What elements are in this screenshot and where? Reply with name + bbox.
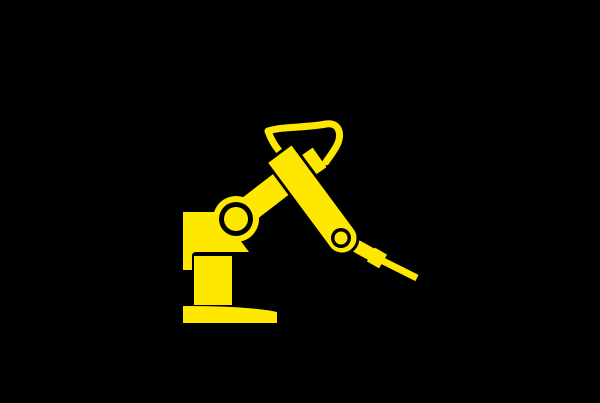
wrist (342, 238, 378, 258)
base foot (183, 306, 277, 323)
shoulder joint (213, 196, 259, 242)
small bracket on forearm (300, 148, 326, 176)
elbow joint (331, 228, 351, 248)
cable loop (268, 124, 340, 162)
tool (367, 248, 387, 268)
upper base block (183, 212, 249, 270)
forearm (266, 143, 358, 254)
pedestal column (194, 256, 232, 305)
lower arm (236, 182, 284, 219)
